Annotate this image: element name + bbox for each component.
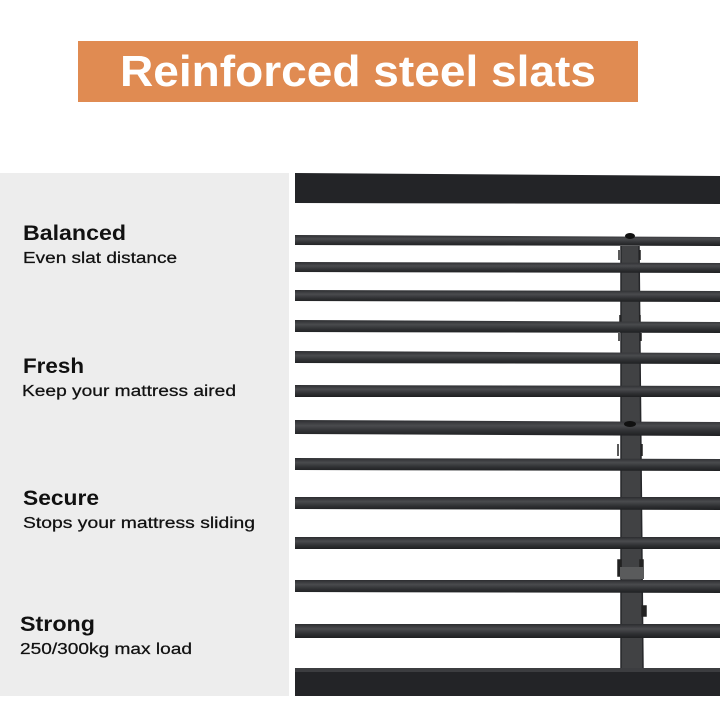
top rail (295, 173, 720, 204)
feature: strong: 250/300kg max load (20, 641, 192, 658)
title banner (78, 41, 638, 102)
feature: fresh (22, 355, 236, 400)
feature: strong (20, 613, 192, 658)
feature: secure: Stops your mattress sliding (23, 515, 255, 532)
panel: features (0, 173, 289, 696)
feature: secure (23, 487, 255, 532)
feature: fresh: Keep your mattress aired (22, 383, 236, 400)
photo: steel slat frame (295, 173, 720, 696)
feature: strong: Strong (20, 613, 95, 636)
feature: fresh: Fresh (23, 355, 84, 378)
centre support beam (618, 246, 646, 668)
feature: balanced: Balanced (23, 222, 126, 245)
feature: balanced: Even slat distance (23, 250, 177, 267)
slats (295, 235, 720, 638)
feature: secure: Secure (23, 487, 99, 510)
title banner: Reinforced steel slats (120, 47, 596, 96)
feature: balanced (23, 222, 177, 267)
bolts (624, 233, 636, 427)
bottom rail (295, 668, 720, 696)
